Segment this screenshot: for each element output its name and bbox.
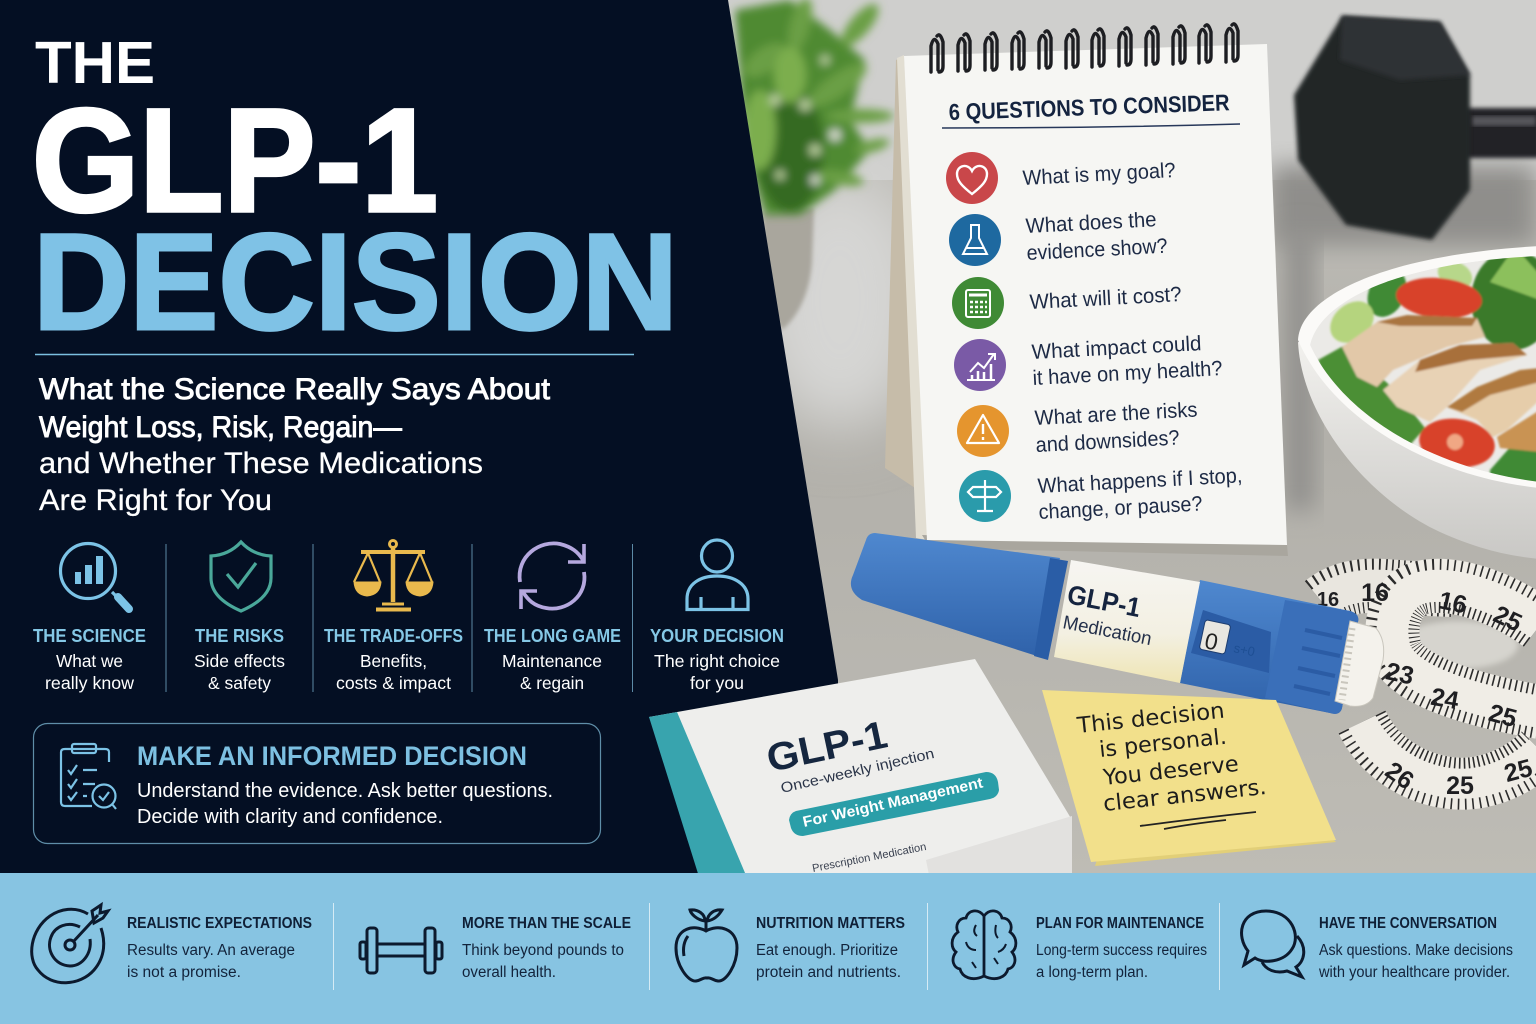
icon: clipboard checklist <box>61 744 116 809</box>
tip: plan for maintenance <box>952 911 1207 981</box>
title <box>32 30 678 359</box>
tip: have the conversation <box>1242 911 1513 981</box>
tip: nutrition matters <box>676 910 905 981</box>
sticky note <box>1042 690 1336 866</box>
icon: growth chart <box>954 339 1006 391</box>
icon: cycle arrows <box>520 543 584 609</box>
title: DECISION <box>33 206 678 359</box>
tip: nutrition matters: protein and nutrients. <box>756 964 901 981</box>
icon: apple <box>676 910 737 981</box>
column: your decision <box>650 540 784 693</box>
sticky note: clear answers. <box>1102 775 1268 817</box>
salad bowl <box>1298 246 1536 559</box>
notebook easel back <box>885 56 920 530</box>
column: the long game <box>484 543 621 693</box>
measuring tape: 25 <box>1501 754 1535 788</box>
tip: realistic expectations <box>32 905 312 983</box>
tip: have the conversation: HAVE THE CONVERSATION <box>1319 915 1497 932</box>
measuring tape: 24 <box>1429 683 1461 715</box>
question list: What are the risks <box>1034 398 1198 430</box>
measuring tape: 16 <box>1436 586 1469 620</box>
injection pen <box>851 533 1384 714</box>
box label text: For Weight Management <box>801 774 985 831</box>
icon: target with arrow <box>32 905 108 983</box>
icon: heart <box>946 152 998 204</box>
measuring tape: 23 <box>1383 657 1416 691</box>
measuring tape: 25 <box>1486 699 1520 733</box>
tip: plan for maintenance: PLAN FOR MAINTENANCE <box>1036 915 1204 932</box>
column: the risks <box>194 542 285 693</box>
box label text: GLP-1 <box>763 713 891 781</box>
sticky note: You deserve <box>1101 752 1240 791</box>
column: the risks: THE RISKS <box>195 625 284 646</box>
icon: dumbbell <box>360 928 442 973</box>
tip: more than the scale: overall health. <box>462 964 556 981</box>
injection pen: s+0 <box>1232 640 1256 659</box>
question list: What will it cost? <box>1029 283 1182 314</box>
title: THE <box>35 30 155 96</box>
title: GLP-1 <box>32 79 438 243</box>
box label text: Prescription Medication <box>811 841 927 875</box>
measuring tape: 26 <box>1380 756 1419 795</box>
column: your decision: YOUR DECISION <box>650 625 784 646</box>
question list: What happens if I stop, <box>1037 464 1243 498</box>
column dividers <box>166 544 632 692</box>
column: the long game: Maintenance <box>502 651 602 671</box>
tip: plan for maintenance: a long-term plan. <box>1036 964 1148 981</box>
column: your decision: The right choice <box>654 651 780 671</box>
column: the trade-offs: THE TRADE-OFFS <box>324 625 463 646</box>
icon: shield <box>211 542 271 611</box>
notebook page <box>904 44 1287 545</box>
notebook heading: 6 QUESTIONS TO CONSIDER <box>948 89 1230 125</box>
tip: realistic expectations: REALISTIC EXPECTATIONS <box>127 915 312 932</box>
dumbbell <box>1294 16 1536 240</box>
icon: speech bubbles <box>1242 911 1304 977</box>
icon: magnifier with chart <box>60 544 129 609</box>
tip: realistic expectations: Results vary. An average <box>127 942 295 959</box>
tip: nutrition matters: Eat enough. Prioritize <box>756 942 898 959</box>
icon: flask <box>949 214 1001 266</box>
question list: What is my goal? <box>1022 159 1176 190</box>
question list: What does the <box>1025 208 1157 238</box>
box teal spine <box>649 712 748 880</box>
tip: plan for maintenance: Long-term success requires <box>1036 942 1207 959</box>
photo background: tabletop <box>700 0 1536 880</box>
box label text <box>763 713 999 875</box>
column: the science: THE SCIENCE <box>33 625 146 646</box>
pen dial section <box>1180 580 1358 714</box>
column: the trade-offs <box>324 540 463 693</box>
question list: evidence show? <box>1026 235 1168 265</box>
pen label: GLP-1 <box>1065 579 1143 623</box>
tip: have the conversation: Ask questions. Make decisions <box>1319 942 1513 959</box>
question list <box>1022 159 1243 524</box>
pen label: Medication <box>1061 612 1153 650</box>
question list: What impact could <box>1031 332 1202 364</box>
column: the trade-offs: Benefits, <box>360 651 427 671</box>
icon: calculator <box>952 277 1004 329</box>
column: the science: really know <box>45 673 134 693</box>
subtitle: What the Science Really Says About <box>39 373 551 406</box>
question list: and downsides? <box>1035 426 1180 457</box>
notebook: 6 questions to consider <box>885 24 1288 556</box>
tip: more than the scale <box>360 915 631 981</box>
callout: make an informed decision: Decide with clarity and confidence. <box>137 806 443 828</box>
sticky note: is personal. <box>1098 725 1228 763</box>
measuring tape: 16 <box>1361 579 1389 607</box>
plant with pot <box>735 0 894 330</box>
tip: more than the scale: Think beyond pounds to <box>462 942 624 959</box>
column: the risks: & safety <box>208 673 271 693</box>
measuring tape <box>1317 579 1536 800</box>
callout: make an informed decision: MAKE AN INFORMED DECISION <box>137 741 527 771</box>
spiral rings <box>931 24 1238 72</box>
icon: person <box>687 540 748 610</box>
white pen cap <box>1335 621 1384 706</box>
column: the science <box>33 544 146 693</box>
icon: brain <box>952 911 1016 979</box>
bottom band <box>0 873 1536 1024</box>
column: your decision: for you <box>690 673 744 693</box>
icon: warning triangle <box>957 405 1009 457</box>
subtitle: and Whether These Medications <box>39 447 483 480</box>
pen label <box>1054 560 1200 683</box>
callout: make an informed decision <box>34 724 600 844</box>
column: the trade-offs: costs & impact <box>336 673 451 693</box>
box label text: Once-weekly injection <box>779 746 936 797</box>
question list: it have on my health? <box>1032 357 1223 390</box>
icon: balance scales <box>354 540 433 610</box>
column: the science: What we <box>56 651 123 671</box>
sticky note: This decision <box>1075 699 1226 739</box>
measuring tape: 25 <box>1446 772 1474 800</box>
medication box <box>649 659 1072 880</box>
subtitle: Are Right for You <box>39 484 272 517</box>
column: the long game: THE LONG GAME <box>484 625 621 646</box>
tip: more than the scale: MORE THAN THE SCALE <box>462 915 631 932</box>
dark title panel <box>0 0 838 880</box>
question list: change, or pause? <box>1038 492 1203 524</box>
callout: make an informed decision: Understand the evidence. Ask better questions. <box>137 780 553 802</box>
subtitle: Weight Loss, Risk, Regain— <box>39 411 402 444</box>
measuring tape: 16 <box>1317 589 1339 611</box>
tip: realistic expectations: is not a promise. <box>127 964 241 981</box>
icon: signpost <box>959 470 1011 522</box>
tip: have the conversation: with your healthcare provider. <box>1318 964 1510 981</box>
subtitle <box>39 373 551 517</box>
measuring tape: 25 <box>1489 600 1526 638</box>
column: the long game: & regain <box>520 673 584 693</box>
injection pen: 0 <box>1202 627 1220 655</box>
column: the risks: Side effects <box>194 651 285 671</box>
tip: nutrition matters: NUTRITION MATTERS <box>756 915 905 932</box>
